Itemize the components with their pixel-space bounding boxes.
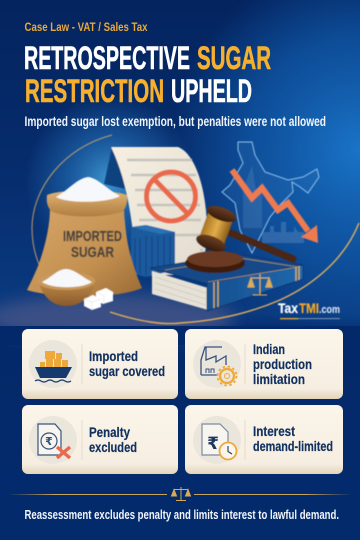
sack label: IMPORTED [63,228,122,245]
gavel head [194,203,238,255]
footer [8,487,352,522]
gavel [185,203,293,273]
hero illustration [27,135,359,324]
title: RESTRICTION [25,73,164,109]
card text: demand-limited [253,439,333,454]
card text: production [253,357,312,372]
icon: document with rupee and clock [202,424,236,460]
card text [253,342,312,387]
bowl of sugar [37,269,96,306]
card text: Indian [253,342,285,357]
sack label [63,228,122,261]
city tower silhouette [243,165,262,228]
scales emblem [248,274,272,295]
icon: cargo ship [35,351,72,382]
card text [89,425,137,455]
gold arcs [32,135,359,324]
card: indian production limitation [185,329,343,399]
gavel handle [231,233,293,259]
icon: factory with gear [201,347,236,386]
prohibition sign [146,172,196,221]
category label: Case Law - VAT / Sales Tax [24,20,148,34]
logo: TMI [299,300,319,316]
logo: .com [319,304,340,316]
sugar cubes [84,288,113,310]
card text: Imported [89,349,138,364]
logo: Tax [278,300,298,316]
title: SUGAR [197,40,271,76]
card text: Interest [253,424,295,439]
logo [278,300,340,319]
icon: document with rupee and cross [38,424,70,458]
law book [150,254,303,311]
gavel base [185,253,245,273]
sack label: SUGAR [71,244,114,261]
card text: sugar covered [89,364,165,379]
downward trend arrow [232,170,318,243]
factory silhouette [262,222,304,243]
document with prohibition sign [104,147,207,275]
header [24,20,326,129]
card: penalty excluded [22,405,178,474]
card text: limitation [253,372,305,387]
title [24,40,271,109]
sugar heap [56,177,120,202]
sugar sack [27,177,142,297]
title: UPHELD [171,73,252,109]
india map [222,142,319,253]
card text [89,349,165,379]
icon: scales of justice [172,487,190,500]
card text [253,424,333,454]
card text: excluded [89,440,137,455]
title: RETROSPECTIVE [24,40,190,76]
card: interest demand-limited [185,405,343,474]
card text: Penalty [89,425,130,440]
icon: document with rupee and clock: ₹ [207,434,219,453]
card: imported sugar covered [22,329,178,399]
shipping container [131,225,175,277]
sack collar [47,190,127,216]
icon: document with rupee and cross: ₹ [45,436,53,448]
